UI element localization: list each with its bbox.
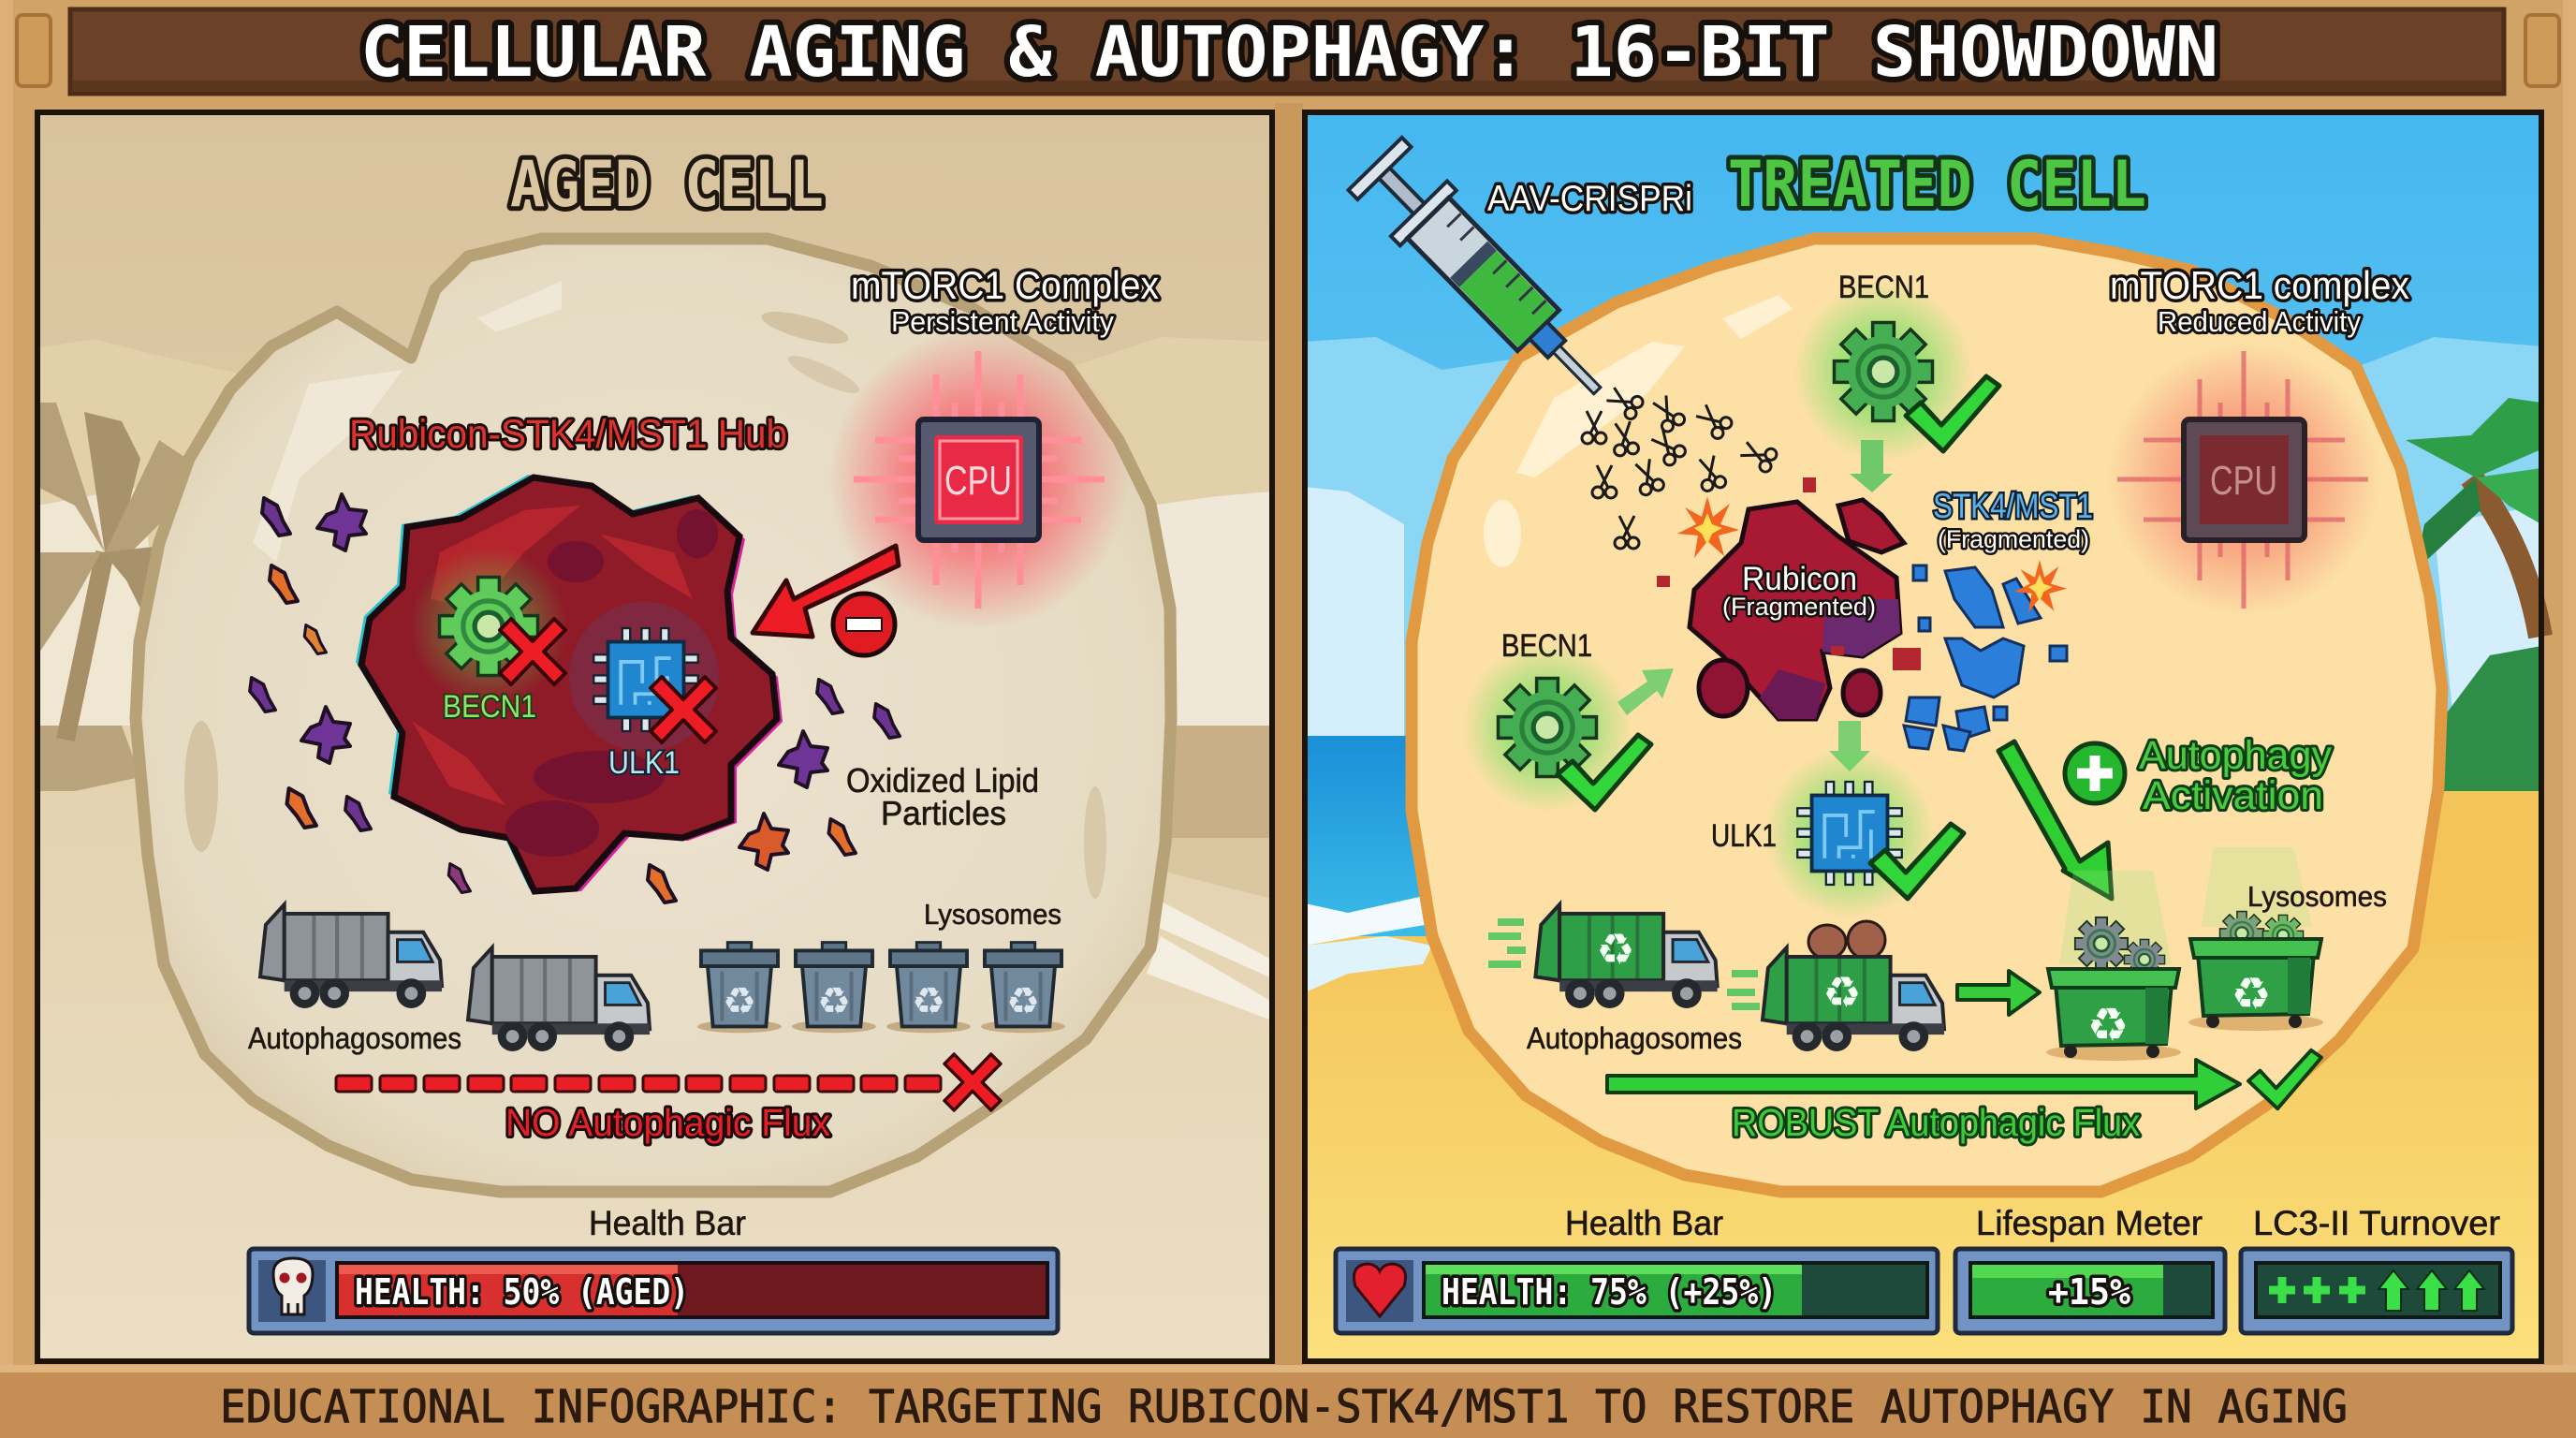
- label: ULK1: ULK1: [608, 745, 680, 781]
- label: autophagy activation: Activation: [2143, 773, 2323, 818]
- panel: aged cell: [37, 112, 1272, 1362]
- icon: mTORC1 CPU chip: [828, 330, 1128, 629]
- inhibition arrow: [753, 546, 899, 637]
- label: STK4/MST1 fragmented: STK4/MST1: [1933, 487, 2093, 525]
- icon: dimmed mTORC1 CPU chip: CPU: [2210, 458, 2277, 504]
- lysosome bin 2 with recycled parts: ♻: [2231, 970, 2272, 1020]
- label: lysosomes: Lysosomes: [924, 898, 1061, 931]
- label: AAV-CRISPRi: AAV-CRISPRi: [1487, 179, 1692, 219]
- label: ULK1: ULK1: [1711, 818, 1777, 854]
- label: autophagy activation: Autophagy: [2139, 733, 2332, 778]
- cell highlights: [1484, 295, 1793, 567]
- left end cap: [17, 15, 51, 86]
- arrow: BECN1 to Rubicon left: [1617, 668, 1674, 715]
- label: lysosomes: Lysosomes: [2247, 880, 2387, 913]
- health bar: treated: [1336, 1249, 1938, 1333]
- icon: autophagosome truck 2: [468, 947, 650, 1051]
- lysosome bins, inactive: ♻: [817, 981, 851, 1022]
- LC3-II turnover meter: [2241, 1249, 2512, 1333]
- icon: active truck 1: ♻: [1596, 925, 1635, 974]
- label: oxidized lipid particles: [846, 761, 1039, 832]
- lysosome bins, inactive: ♻: [1006, 981, 1040, 1022]
- label: BECN1 top: BECN1: [1838, 270, 1929, 305]
- footer band: [0, 1365, 2576, 1438]
- robust flux arrow: [1607, 1060, 2240, 1108]
- arrow: BECN1 to Rubicon: [1850, 440, 1893, 492]
- Rubicon chunk left: [1699, 660, 1748, 716]
- check mark: [1558, 735, 1651, 810]
- fragmented Rubicon: [1657, 477, 1921, 719]
- label: Rubicon fragmented: [1722, 561, 1876, 621]
- label: LC3-II turnover: LC3-II Turnover: [2253, 1204, 2500, 1242]
- label: Rubicon hub: Rubicon-STK4/MST1 Hub: [349, 412, 787, 457]
- icon: flux check: [2248, 1050, 2321, 1108]
- label: STK4/MST1 fragmented: [1933, 487, 2093, 553]
- icon: active truck 2 with cargo: [1727, 921, 1944, 1051]
- icon: ULK1 chip, active: [1765, 749, 1964, 917]
- icon: dimmed mTORC1 CPU chip: [2108, 344, 2379, 615]
- fragmented STK4/MST1: [1904, 565, 2067, 751]
- lifespan meter: +15%: [2048, 1271, 2130, 1313]
- icon: skull: [273, 1258, 313, 1314]
- label: BECN1 left: BECN1: [1501, 628, 1592, 664]
- label: health bar: Health Bar: [589, 1204, 746, 1242]
- debris: [1657, 477, 1921, 670]
- label: oxidized lipid particles: Particles: [881, 794, 1006, 832]
- arrow: truck to lysosome: [1957, 971, 2040, 1015]
- Rubicon chunk upper: [1838, 500, 1904, 552]
- Rubicon-STK4/MST1 hub blob: [356, 475, 783, 894]
- lysosome bins, inactive: ♻: [912, 981, 945, 1022]
- heading: treated cell: TREATED CELL: [1728, 148, 2146, 222]
- icon: BECN1 gear, active: [1794, 283, 1999, 461]
- lifespan meter: [1955, 1249, 2225, 1333]
- faded palm tree: [37, 403, 187, 740]
- health bar: aged: [249, 1249, 1058, 1333]
- icon: mTORC1 CPU chip: CPU: [944, 458, 1012, 504]
- lysosome bin 1 with recycled parts: ♻: [2087, 999, 2129, 1051]
- label: mTORC1 complex: mTORC1 complex: [2110, 263, 2409, 307]
- title banner: [17, 9, 2559, 94]
- plus signs: [2269, 1277, 2365, 1303]
- icon: plus circle: [2065, 743, 2125, 803]
- ULK1 chip, blocked: [569, 602, 719, 752]
- label: robust autophagic flux: ROBUST Autophagic Flux: [1732, 1101, 2140, 1144]
- label: health bar: Health Bar: [1565, 1204, 1723, 1242]
- red x on ULK1: [651, 677, 716, 742]
- icon: spark on Rubicon: [1677, 496, 1739, 558]
- panel background: sunny beach: [1305, 112, 2541, 1361]
- health text: HEALTH: 50% (AGED): [355, 1271, 689, 1313]
- icon: heart: [1354, 1264, 1406, 1316]
- BECN1 gear, blocked: [409, 547, 568, 706]
- title: CELLULAR AGING & AUTOPHAGY: 16-BIT SHOWDOWN: [360, 12, 2218, 93]
- label: autophagosomes: Autophagosomes: [1527, 1021, 1742, 1055]
- panel: treated cell: [1305, 112, 2541, 1361]
- palm tree: [2406, 398, 2541, 791]
- oxidized lipid particles: [250, 494, 900, 902]
- icon: BECN1 gear left, active: [1463, 643, 1651, 812]
- lysosome bin 2 with recycled parts: [2188, 847, 2323, 1031]
- check mark: [1870, 824, 1964, 899]
- health text: HEALTH: 75% (+25%): [1442, 1271, 1777, 1313]
- lysosome bins, inactive: ♻: [723, 981, 756, 1022]
- icon: active truck 1: [1488, 904, 1718, 1008]
- icon: spark on STK4: [2014, 560, 2067, 612]
- lysosome bin 1 with recycled parts: [2046, 871, 2181, 1061]
- CRISPR scissors: [1582, 384, 1778, 549]
- label: mTORC1 complex: mTORC1 Complex: [851, 263, 1159, 307]
- label: reduced activity: Reduced Activity: [2158, 305, 2361, 338]
- label: STK4/MST1 fragmented: (Fragmented): [1938, 525, 2089, 553]
- footer text: EDUCATIONAL INFOGRAPHIC: TARGETING RUBICON-STK4/MST1 TO RESTORE AUTOPHAGY IN AGING: [220, 1381, 2348, 1433]
- label: persistent activity: Persistent Activity: [891, 305, 1114, 338]
- up arrows: [2378, 1270, 2484, 1311]
- arrow: Rubicon to ULK1: [1829, 721, 1870, 771]
- lysosome bins, inactive: [697, 943, 1065, 1033]
- icon: autophagosome truck 1: [260, 904, 442, 1008]
- blocked flux dashed line: [336, 1076, 941, 1092]
- check mark: [1906, 376, 1999, 451]
- treated cell body: [1412, 239, 2442, 1192]
- label: BECN1: BECN1: [443, 689, 536, 725]
- icon: inhibition minus: [833, 594, 895, 655]
- panel background: faded beach: [37, 112, 1272, 1362]
- icon: active truck 2 with cargo: ♻: [1822, 968, 1862, 1017]
- icon: flux blocked x: [944, 1054, 1001, 1110]
- label: Rubicon fragmented: Rubicon: [1742, 561, 1857, 597]
- aged cell body: [136, 239, 1171, 1192]
- right end cap: [2525, 15, 2559, 86]
- label: lifespan meter: Lifespan Meter: [1976, 1204, 2203, 1242]
- cell highlights: [184, 281, 1106, 899]
- heading: aged cell: AGED CELL: [510, 148, 824, 222]
- red x on BECN1: [500, 619, 565, 684]
- label: Rubicon fragmented: (Fragmented): [1722, 593, 1876, 621]
- label: autophagosomes: Autophagosomes: [248, 1021, 461, 1055]
- icon: AAV-CRISPRi syringe: [1347, 137, 1625, 418]
- label: autophagy activation: [2139, 733, 2332, 818]
- label: no autophagic flux: NO Autophagic Flux: [505, 1101, 830, 1144]
- label: oxidized lipid particles: Oxidized Lipid: [846, 761, 1039, 800]
- Rubicon chunk right: [1843, 670, 1881, 715]
- arrow: autophagy activation: [1998, 741, 2112, 899]
